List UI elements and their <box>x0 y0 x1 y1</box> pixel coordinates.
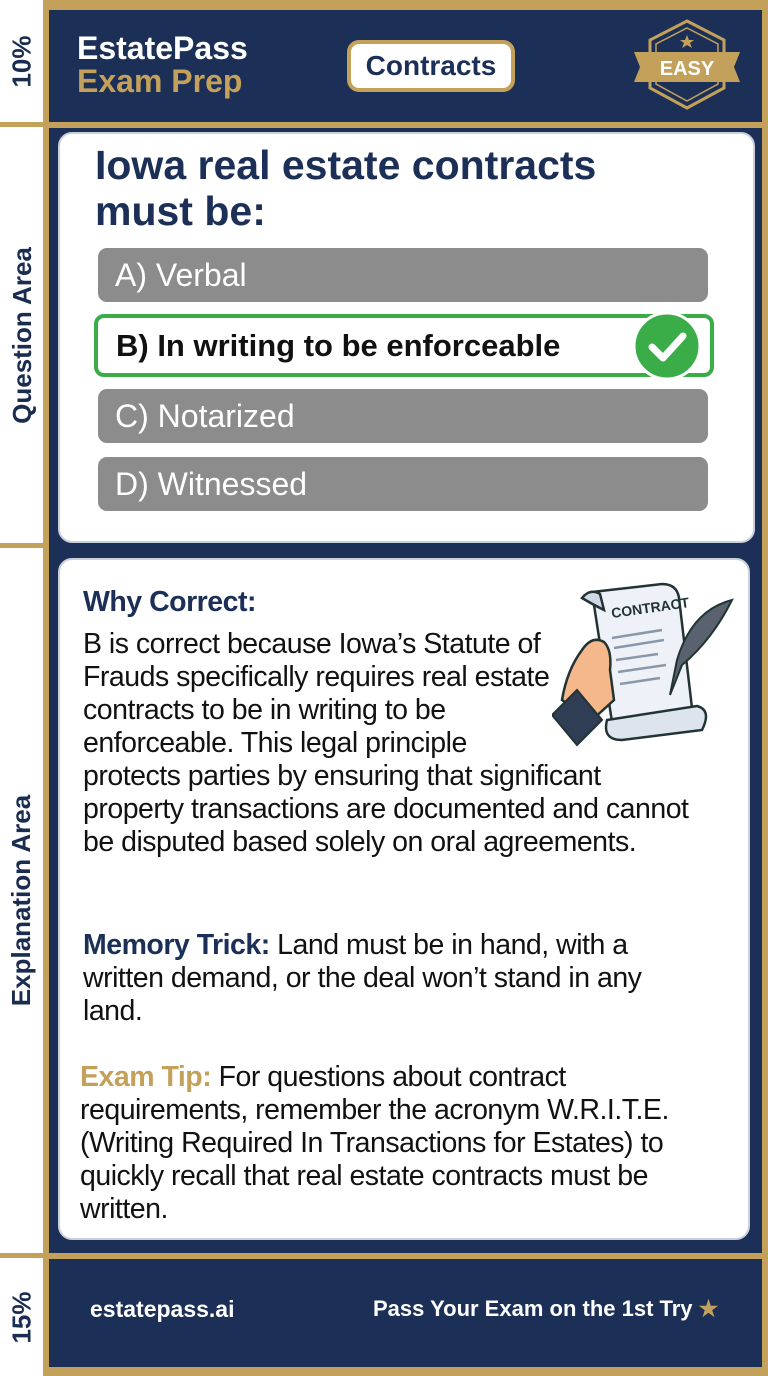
navy main <box>49 128 762 1253</box>
side label: Explanation Area: Explanation Area <box>6 795 36 1006</box>
memory trick: written demand, or the deal won’t stand in any <box>83 962 641 994</box>
why correct <box>83 586 689 858</box>
memory trick: Memory Trick: Land must be in hand, with a <box>83 929 628 961</box>
icon: contract with quill: CONTRACT <box>610 594 691 621</box>
why correct: protects parties by ensuring that significant <box>83 760 601 792</box>
exam tip: written. <box>80 1193 168 1225</box>
topic badge <box>347 40 515 92</box>
option A: A) Verbal <box>115 257 247 293</box>
why correct: enforceable. This legal principle <box>83 727 467 759</box>
why correct: B is correct because Iowa’s Statute of <box>83 628 540 660</box>
option D: D) Witnessed <box>115 466 307 502</box>
exam tip: quickly recall that real estate contracts must be <box>80 1160 648 1192</box>
footer url: estatepass.ai <box>90 1296 234 1322</box>
icon: contract with quill <box>552 582 734 746</box>
navy header <box>49 10 762 122</box>
why correct: be disputed based solely on oral agreements. <box>83 826 636 858</box>
memory trick: land. <box>83 995 142 1027</box>
logo <box>77 30 248 99</box>
topic badge: Contracts <box>366 50 496 81</box>
option B correct: B) In writing to be enforceable <box>116 328 560 363</box>
question card <box>58 132 755 543</box>
exam tip: (Writing Required In Transactions for Estates) to <box>80 1127 663 1159</box>
footer tagline: Pass Your Exam on the 1st Try ★ <box>373 1296 718 1321</box>
explanation card <box>58 558 750 1240</box>
exam tip <box>80 1061 669 1225</box>
why correct: Frauds specifically requires real estate <box>83 661 549 693</box>
why correct: property transactions are documented and cannot <box>83 793 688 825</box>
side label: 10%: 10% <box>7 35 37 87</box>
icon: check <box>636 314 698 378</box>
side label: Question Area: Question Area <box>6 247 36 423</box>
option A <box>98 248 708 302</box>
logo: EstatePass <box>77 30 248 66</box>
option C: C) Notarized <box>115 398 295 434</box>
difficulty badge: EASY <box>660 58 715 80</box>
exam tip: requirements, remember the acronym W.R.I.T.E. <box>80 1094 669 1126</box>
question title: Iowa real estate contracts <box>95 142 596 188</box>
question title <box>95 142 596 234</box>
question title: must be: <box>95 188 266 234</box>
difficulty badge <box>634 19 740 110</box>
option B correct <box>94 314 714 377</box>
exam tip: Exam Tip: For questions about contract <box>80 1061 566 1093</box>
option C <box>98 389 708 443</box>
why correct: contracts to be in writing to be <box>83 694 446 726</box>
side label: 15%: 15% <box>7 1291 37 1343</box>
memory trick <box>83 929 642 1027</box>
navy footer <box>49 1259 762 1367</box>
why correct: Why Correct: <box>83 586 256 618</box>
logo: Exam Prep <box>77 63 242 99</box>
option D <box>98 457 708 511</box>
